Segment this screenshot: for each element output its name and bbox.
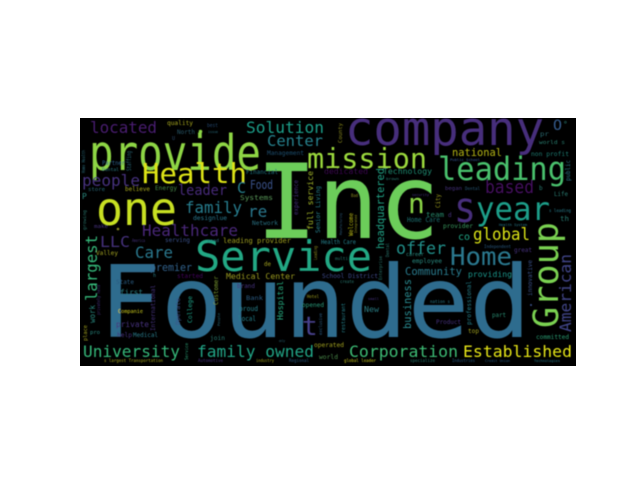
small words: School District xyxy=(322,273,378,280)
small words: d xyxy=(448,212,452,219)
small words: make xyxy=(94,224,108,230)
small words: Home Care xyxy=(407,216,440,224)
small words: started xyxy=(177,273,203,280)
word: LLC: LLC xyxy=(100,233,130,251)
small words: small xyxy=(368,297,379,301)
small words: quality xyxy=(167,119,193,127)
small words: Bad xyxy=(351,193,359,198)
small words: Health System xyxy=(499,222,528,227)
small words: Energy xyxy=(155,185,177,192)
word: Corporation: Corporation xyxy=(349,342,458,361)
small words: serving xyxy=(165,237,190,244)
small words: Dental xyxy=(102,167,119,173)
small words: Manufacturing xyxy=(339,213,343,235)
small words: believe xyxy=(125,186,150,193)
small words: North xyxy=(177,129,195,136)
small words: pr xyxy=(540,130,549,138)
small words: nation s xyxy=(430,299,450,305)
small words: security xyxy=(412,193,429,197)
word: offer: offer xyxy=(396,239,446,259)
word: Center: Center xyxy=(267,132,323,150)
small words: multi xyxy=(335,256,349,261)
word cloud figure xyxy=(80,118,576,366)
small words: best xyxy=(207,123,218,129)
small words: global leader xyxy=(344,358,376,363)
small words: Hotel xyxy=(307,294,320,299)
small words: Technology xyxy=(383,167,432,176)
word: Group: Group xyxy=(527,222,567,328)
small words: C xyxy=(237,179,246,197)
small words: create xyxy=(340,279,355,284)
word: national: national xyxy=(452,146,502,159)
small words: restaurant xyxy=(341,303,347,333)
small words: P xyxy=(82,192,87,201)
small words: Systems xyxy=(240,194,273,202)
small words: Financial xyxy=(246,169,278,176)
small words: first xyxy=(120,288,143,297)
small words: Medical Center xyxy=(226,272,295,281)
word: leader: leader xyxy=(178,183,227,199)
small words: employee xyxy=(412,258,442,265)
small words: Hospital xyxy=(275,281,285,320)
small words: professional xyxy=(466,281,473,325)
word: people: people xyxy=(82,171,140,190)
word: Healthcare: Healthcare xyxy=(142,221,238,240)
small words: provider xyxy=(443,223,473,230)
small words: ° xyxy=(563,120,568,129)
small words: place xyxy=(83,325,89,341)
small words: team xyxy=(426,211,444,219)
small words: innovative xyxy=(527,260,534,296)
small words: s leading xyxy=(549,208,571,214)
small words: join xyxy=(210,335,225,342)
small words: operated xyxy=(314,342,344,349)
word: located: located xyxy=(90,118,157,137)
small words: public xyxy=(565,160,572,181)
small words: Valley xyxy=(96,250,118,257)
small words: providing xyxy=(468,270,512,279)
small words: opened xyxy=(302,302,324,309)
small words: leading provider xyxy=(223,237,291,245)
word: re: re xyxy=(248,202,267,221)
small words: issue xyxy=(208,130,218,134)
word: Inc: Inc xyxy=(256,143,440,263)
small words: Automotive xyxy=(198,358,223,364)
word: Community: Community xyxy=(405,266,462,278)
small words: world xyxy=(319,354,338,361)
small words: committed xyxy=(536,334,569,341)
small words: Management xyxy=(267,150,304,157)
small words: Independent xyxy=(484,244,512,249)
small words: only xyxy=(279,339,285,343)
small words: full service xyxy=(306,171,315,230)
small words: Bank xyxy=(246,295,263,302)
small words: brand xyxy=(237,283,255,290)
small words: part xyxy=(492,312,506,319)
small words: Dental xyxy=(465,186,481,191)
small words: America xyxy=(132,238,145,243)
small words: State xyxy=(116,279,134,286)
small words: s largest Transportation xyxy=(104,358,163,364)
word: s: s xyxy=(454,183,476,232)
word: family: family xyxy=(185,198,242,217)
small words: Operate xyxy=(175,298,182,325)
word: year: year xyxy=(476,190,550,228)
small words: Regional xyxy=(289,358,310,363)
small words: Home Health xyxy=(81,149,86,173)
word: University: University xyxy=(83,342,180,361)
small words: career xyxy=(406,252,425,258)
small words: International xyxy=(151,285,157,331)
small words: Leading xyxy=(313,246,318,260)
small words xyxy=(81,118,572,364)
small words: Customer xyxy=(213,276,220,305)
word: n: n xyxy=(408,187,425,220)
small words: world s xyxy=(539,140,565,146)
small words: Senior Living xyxy=(314,186,322,233)
small words: privately held xyxy=(96,284,101,315)
small words: Credit Union xyxy=(485,359,510,363)
small words: Companie xyxy=(118,309,143,315)
small words: O xyxy=(553,118,562,134)
small words: Product xyxy=(436,319,461,326)
small words: U xyxy=(172,136,175,142)
small words: private xyxy=(116,320,149,329)
word: Service: Service xyxy=(195,232,372,281)
small words: Dental xyxy=(385,242,390,257)
small words: Food xyxy=(250,178,273,192)
word: based: based xyxy=(485,177,534,198)
small words: industry xyxy=(256,358,275,363)
small words: began xyxy=(445,186,462,192)
word: family owned: family owned xyxy=(197,342,314,361)
small words: help xyxy=(117,332,132,339)
small words: non profit xyxy=(531,151,569,158)
word: Solution: Solution xyxy=(246,118,324,137)
word: largest: largest xyxy=(82,235,101,301)
small words: local xyxy=(238,315,256,323)
word: leading: leading xyxy=(438,150,566,188)
small words: top xyxy=(468,328,479,335)
small words: growing xyxy=(82,210,88,230)
word: company: company xyxy=(345,102,544,157)
word: one: one xyxy=(96,182,177,236)
small words: Staffing xyxy=(126,151,133,171)
word: global: global xyxy=(473,225,530,245)
small words: business xyxy=(402,279,414,329)
small words: Public School xyxy=(450,158,480,162)
small words: th xyxy=(560,215,569,223)
word: premier: premier xyxy=(150,261,192,274)
small words: Technologies xyxy=(534,359,560,363)
small words: b xyxy=(539,185,543,192)
small words: Integrated xyxy=(354,215,358,233)
small words: experience xyxy=(293,180,300,215)
small words: County xyxy=(338,122,344,143)
small words: Industries xyxy=(452,358,476,363)
small words: Health Care xyxy=(321,239,356,246)
small words: exclusive xyxy=(318,312,323,335)
word: headquartered: headquartered xyxy=(375,168,387,249)
small words: College xyxy=(186,296,194,323)
small words: designlue xyxy=(193,215,227,222)
panel: black word cloud background xyxy=(80,118,576,366)
word: provide: provide xyxy=(89,125,261,182)
word: Care: Care xyxy=(135,243,173,262)
word: Health: Health xyxy=(142,157,247,190)
small words: brown xyxy=(386,177,399,181)
small words: People xyxy=(217,313,221,326)
small words: h xyxy=(153,273,156,279)
small words: seed xyxy=(207,238,220,243)
small words: Enterprise xyxy=(378,255,383,280)
small words: co xyxy=(458,232,470,243)
small words: Network xyxy=(252,220,278,227)
word: Home: Home xyxy=(450,242,512,271)
word: Founded: Founded xyxy=(99,244,531,361)
word cloud: all words xyxy=(81,102,575,364)
small words: Life xyxy=(554,191,568,198)
small words: proud xyxy=(239,305,258,313)
small words: Partner xyxy=(102,160,125,167)
word: Established: Established xyxy=(463,342,572,361)
small words: Medical xyxy=(133,332,158,339)
word: mission: mission xyxy=(307,142,427,175)
word: t: t xyxy=(302,312,318,342)
small words: Welcome xyxy=(347,213,355,236)
small words: City xyxy=(435,194,442,208)
small words: Service xyxy=(184,342,189,360)
small words: de xyxy=(264,261,271,268)
word: American: American xyxy=(556,254,575,332)
small words: New xyxy=(364,305,380,314)
small words: great xyxy=(514,247,532,254)
small words: dedicated xyxy=(324,167,368,176)
small words: pro xyxy=(90,330,100,336)
small words: specialize xyxy=(410,358,436,363)
small words: store xyxy=(88,187,105,193)
small words: work xyxy=(88,305,97,323)
